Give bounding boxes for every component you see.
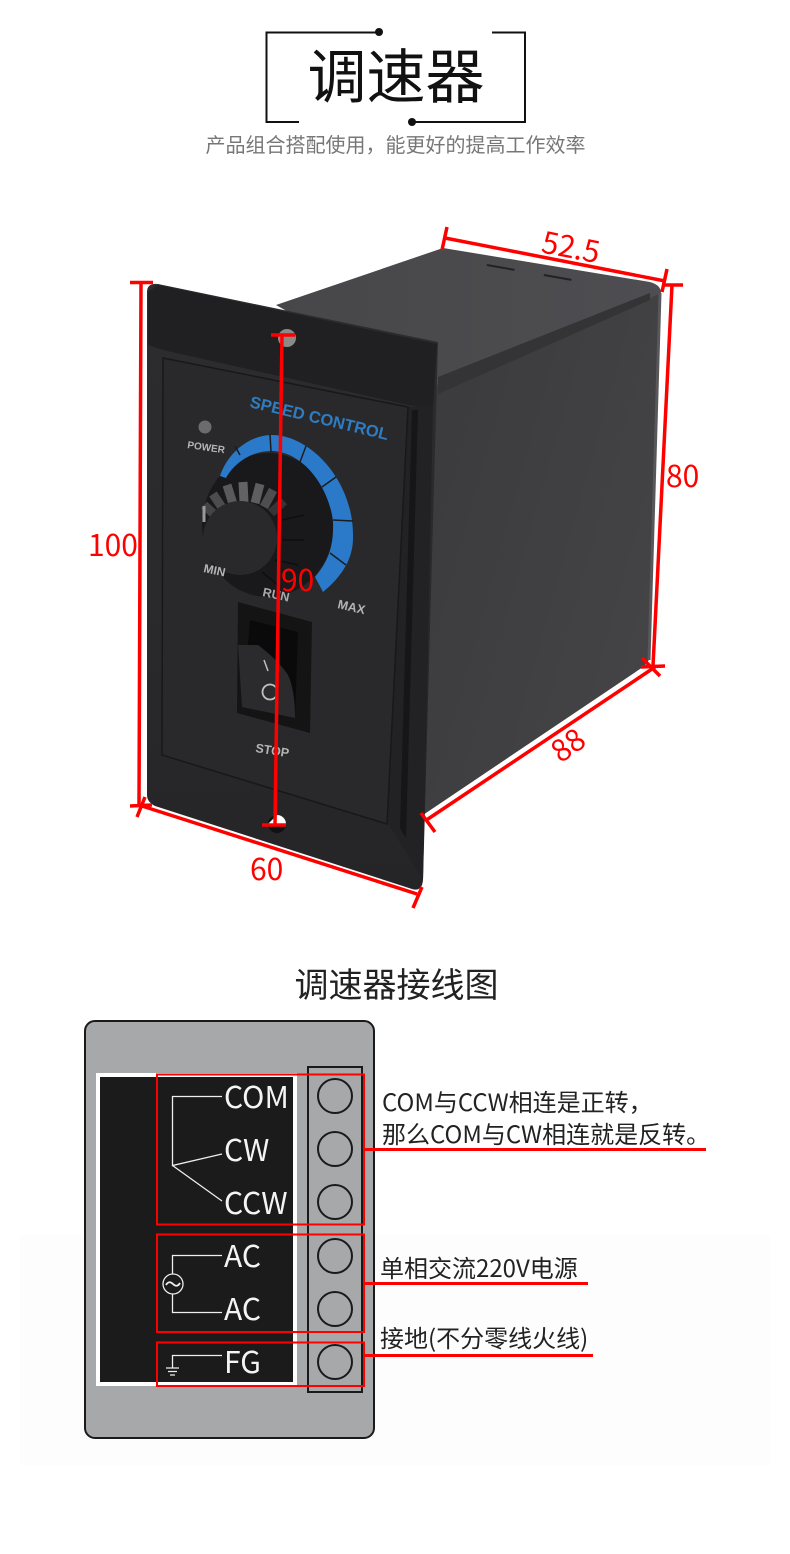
controller body top face [276, 248, 661, 392]
terminal labels: AC [224, 1232, 261, 1276]
dimension lines [130, 227, 683, 908]
subtitle: 产品组合搭配使用，能更好的提高工作效率 [206, 129, 586, 158]
knob well [202, 453, 334, 597]
body fold crease [438, 293, 650, 394]
speed control label: SPEED CONTROL [248, 393, 390, 444]
rocker switch [237, 602, 312, 733]
callout text: ground: 接地(不分零线火线) [380, 1319, 588, 1354]
front plate [147, 284, 438, 890]
terminal label block [98, 1075, 295, 1384]
min label: MIN [202, 561, 227, 580]
terminal labels: COM [224, 1073, 289, 1117]
plate top shading [148, 285, 437, 408]
mounting hole top [278, 329, 296, 347]
terminal labels [224, 1073, 289, 1382]
callout text: direction: 那么COM与CW相连就是反转。 [382, 1115, 710, 1150]
power label: POWER [187, 440, 226, 456]
knob [203, 482, 304, 585]
knob ribs [204, 482, 284, 516]
dimension label 88: 88 [541, 716, 593, 771]
switch wiring symbol [172, 1096, 222, 1201]
terminal labels: CCW [224, 1179, 288, 1223]
terminal labels: CW [224, 1126, 269, 1170]
terminal strip [308, 1067, 362, 1392]
title: 调速器 [307, 30, 485, 115]
dimension 90 line [262, 335, 295, 825]
controller body side face [420, 293, 661, 817]
dimension label 60: 60 [250, 845, 283, 889]
red group boxes [157, 1074, 364, 1386]
callout line: ground [364, 1354, 593, 1357]
plate right strip [388, 405, 433, 880]
terminal labels: FG [224, 1338, 261, 1382]
callout text: direction: COM与CCW相连是正转， [382, 1083, 653, 1118]
dimension 52.5 line [442, 227, 667, 292]
product photo: speed controller [147, 248, 661, 890]
power led [198, 420, 212, 434]
callout text: power: 单相交流220V电源 [380, 1249, 578, 1284]
dimension label 52.5: 52.5 [539, 218, 604, 272]
body right edge highlight [649, 293, 660, 660]
ground symbol [166, 1356, 222, 1375]
terminal screws [318, 1079, 352, 1379]
title frame [266, 28, 525, 126]
top vents [487, 264, 572, 281]
dimension 88 line [421, 658, 660, 832]
dial dividers [235, 434, 353, 565]
blue dial arc [220, 435, 353, 592]
dimension label 90: 90 [281, 556, 314, 600]
max label: MAX [336, 597, 367, 617]
dimension 80 line [641, 285, 683, 667]
dimension 60 line [137, 797, 422, 908]
wiring diagram panel [85, 1021, 374, 1438]
callout line: direction [364, 1148, 706, 1151]
dimension label 100: 100 [88, 521, 138, 565]
inner panel [162, 358, 408, 824]
callout line: power [364, 1282, 588, 1285]
terminal labels: AC [224, 1285, 261, 1329]
stop label: STOP [255, 741, 290, 760]
mounting hole bottom [268, 815, 286, 833]
dimension label 80: 80 [666, 452, 699, 496]
AC source symbol [163, 1256, 222, 1312]
wiring diagram heading: 调速器接线图 [294, 958, 498, 1007]
faint background band [20, 1235, 770, 1465]
run label: RUN [261, 585, 291, 605]
dimension 100 line [130, 282, 153, 806]
